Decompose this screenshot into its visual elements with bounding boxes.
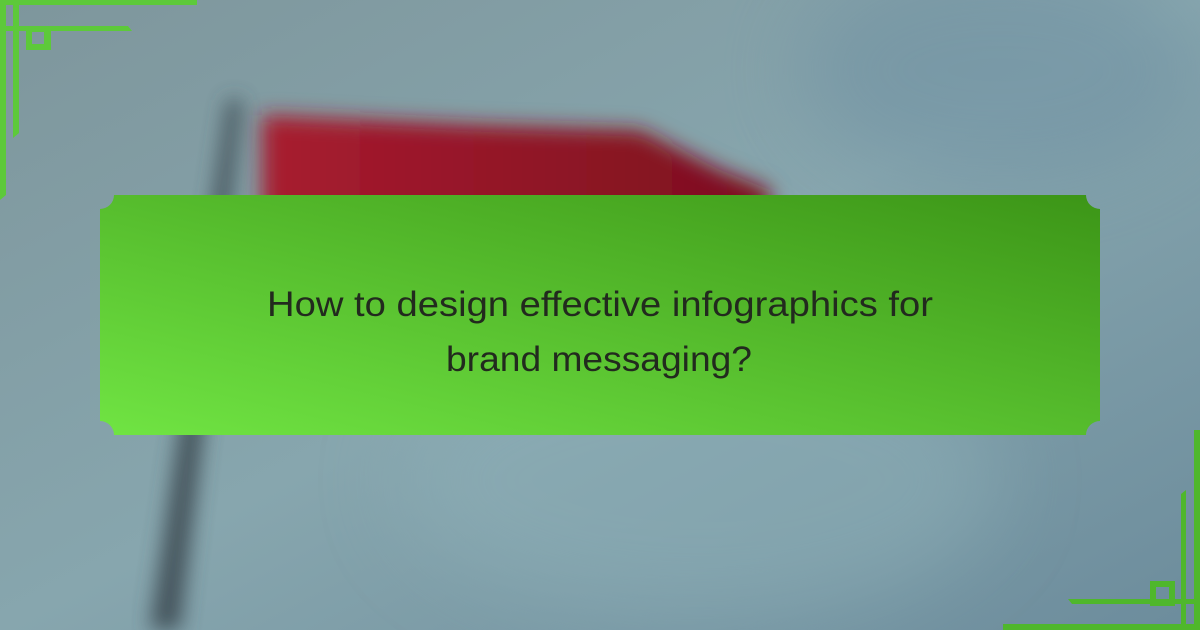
decoration: top-left corner frame — [0, 0, 197, 200]
decoration: bottom-right corner frame — [1003, 430, 1200, 630]
title panel: brand messaging? — [446, 340, 752, 379]
title panel — [100, 195, 1100, 435]
title text: How to design effective infographics for — [267, 285, 933, 324]
